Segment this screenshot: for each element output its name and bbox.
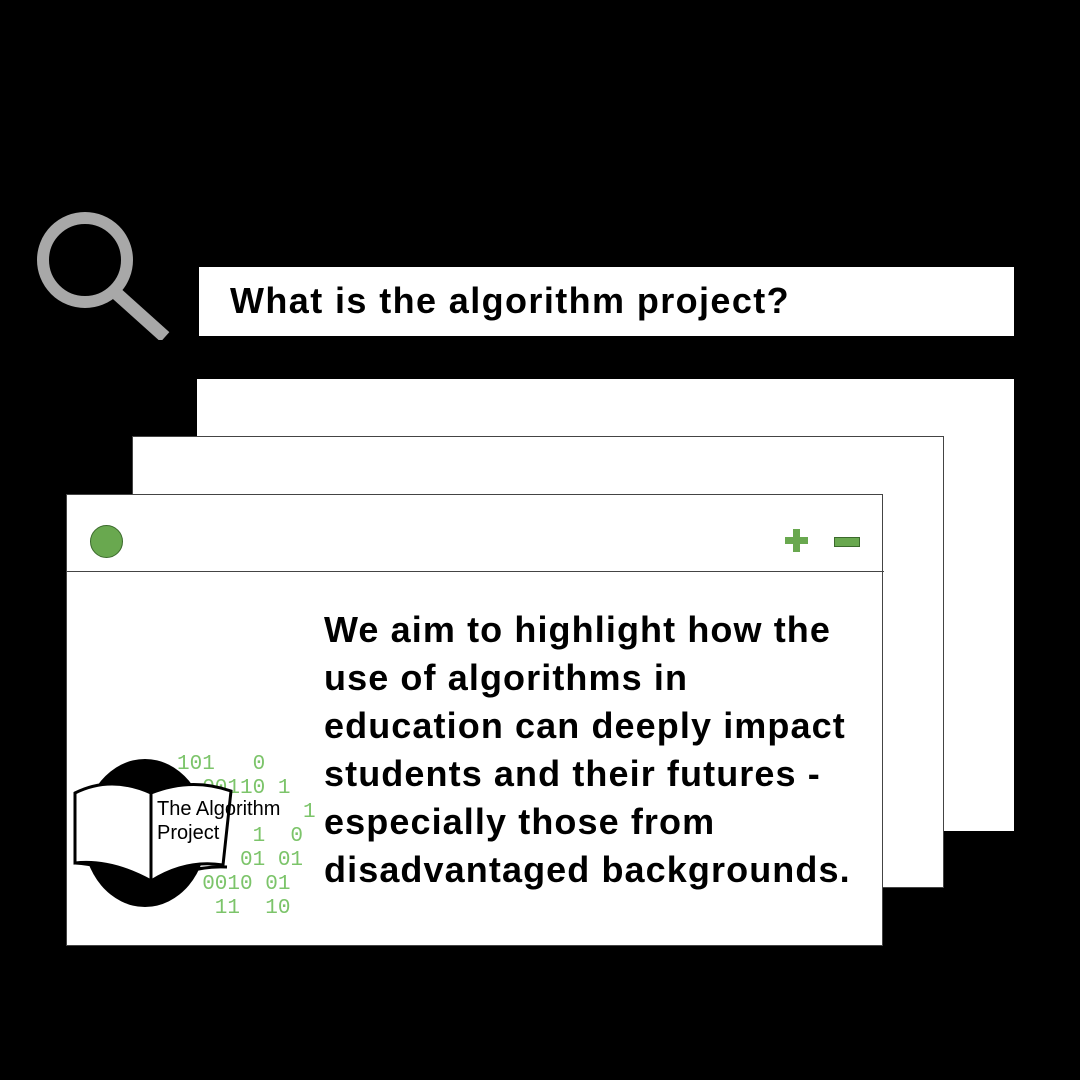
back window 2 <box>132 436 944 888</box>
icon: minus <box>834 537 860 547</box>
back window 1 <box>197 379 1014 831</box>
logo: Project <box>157 822 219 844</box>
body text: use of algorithms in <box>324 657 688 698</box>
front window <box>66 494 883 946</box>
logo: The Algorithm <box>157 798 280 820</box>
body text: disadvantaged backgrounds. <box>324 849 851 890</box>
window dot <box>90 525 123 558</box>
body text <box>324 609 851 890</box>
logo: 101 0 00110 1 1 1 0 01 01 0010 01 11 10 <box>177 753 316 920</box>
icon: plus <box>785 529 808 552</box>
body text: education can deeply impact <box>324 705 846 746</box>
logo <box>74 753 316 920</box>
heading: What is the algorithm project? <box>230 280 790 321</box>
body text: students and their futures - <box>324 753 821 794</box>
body text: especially those from <box>324 801 715 842</box>
icon: magnifier <box>37 212 170 340</box>
body text: We aim to highlight how the <box>324 609 831 650</box>
search bar <box>199 267 1014 336</box>
